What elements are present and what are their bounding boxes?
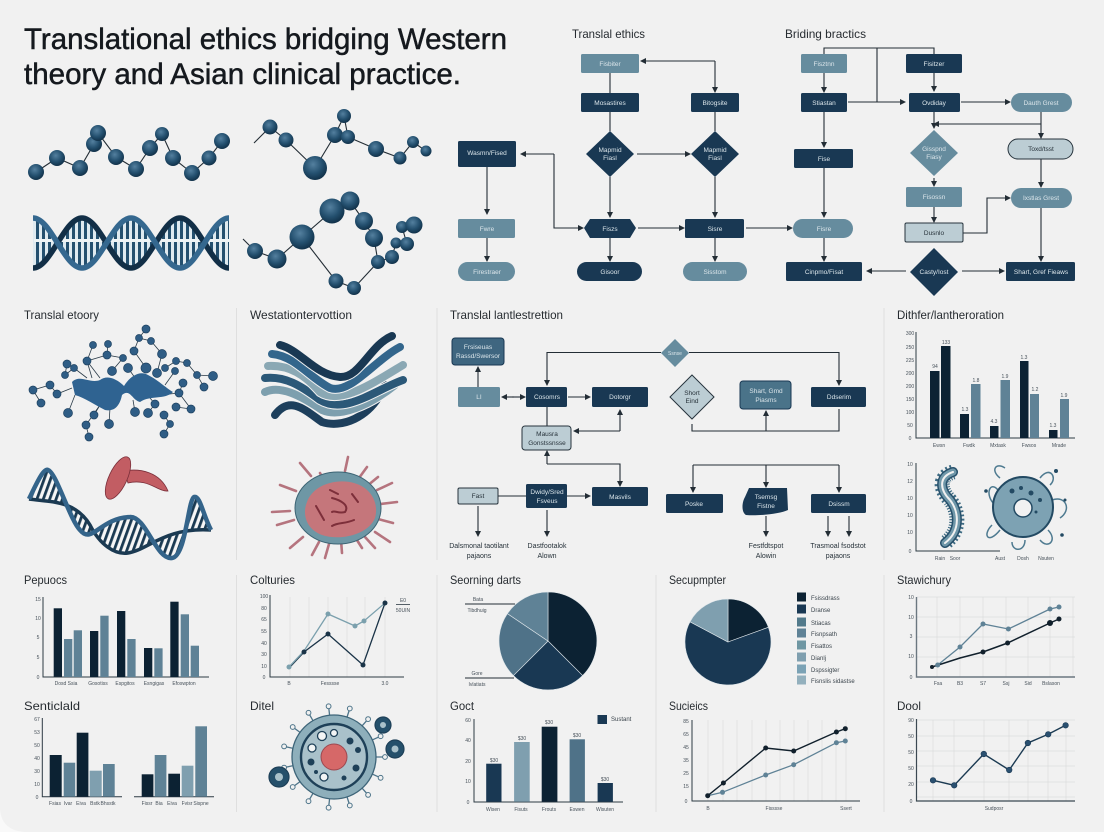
bar chart: dithfer: Fwsos [1022,443,1037,449]
line chart: colturies: 10 [261,664,267,670]
small diamond [661,339,689,367]
bar chart: pepuocs: 10 [35,616,41,622]
heading: seorning darts: Seorning darts [450,573,521,587]
box: Ddserim [827,394,851,401]
bar chart: dithfer: 1.9 [1002,374,1009,380]
line chart: dool: 50 [908,750,914,756]
decision diamond: Eind [685,398,699,405]
box: Fsveus [537,498,558,505]
bar chart: senticlald: 0 [36,795,39,801]
box [1006,262,1075,281]
bar chart: pepuocs: 0 [37,675,40,681]
box [909,93,960,112]
pie legend: Fisattos [811,644,832,650]
box [458,219,515,238]
pie legend: Dranse [811,608,831,614]
title [24,23,507,91]
box: Masvils [609,494,632,501]
decision diamond: Gisspnd [922,146,946,153]
bar chart: senticlald: 50 [34,743,40,749]
icon: worm microbe chart [907,462,1000,562]
decision diamond: Fiasl [708,155,722,162]
line chart: sucieics: B [706,806,710,812]
line chart: stawichury: Ssj [1003,681,1009,687]
bar chart: senticlald: 10 [34,782,40,788]
pill: Sisstom [703,269,727,276]
bar chart: senticlald: 30 [34,769,40,775]
pie legend: Fisnpsath [811,632,837,638]
molecule chain one [28,125,230,181]
decision diamond: Casty/Iost [920,269,949,276]
line chart: colturies: 30 [261,652,267,658]
pale box: Gonstssnsse [528,440,566,447]
box: Shart, Gref Fieaws [1014,269,1069,276]
line chart: dool: 0 [910,799,913,805]
box: Frsiseuas [464,344,493,351]
molecule chain two [254,109,432,180]
line chart: stawichury: Sid [1024,681,1032,687]
decision diamond [691,131,739,177]
pie labels: Tibdhuig [468,608,487,614]
bar chart: dithfer: 1.8 [973,378,980,384]
box [581,54,639,73]
pill outlined: Toxd/tsst [1028,146,1054,153]
line chart: sucieics: Fisssse [766,806,783,812]
box: Poske [685,501,703,508]
box: Rassd/Swersor [456,353,501,360]
bar chart: dithfer: 1.3 [1021,355,1028,361]
bar chart: dithfer: 133 [942,340,950,346]
box [458,141,516,167]
line chart: stawichury: B3 [957,681,963,687]
line chart: colturies: 3.0 [382,681,389,687]
bar chart: dithfer: 4.3 [991,419,998,425]
decision diamond [670,375,714,419]
blob box: Tsemsg [755,494,778,501]
icon: worm microbe chart: 10 [907,496,913,502]
decision diamond: Fiasl [603,155,617,162]
line chart: colturies: 40 [261,641,267,647]
pie legend: Fisnslis sidastse [811,679,855,685]
heading: dithfer lanther oration: Dithfer/lantheroration [897,308,1004,322]
line chart: sucieics: Ssert [840,806,852,812]
box [740,381,791,409]
line chart: sucieics [683,719,860,812]
pill [683,262,747,281]
heading: westationtervottion: Westationtervottion [250,308,352,322]
box: Fisztnn [814,61,835,68]
heading: goct: Goct [450,699,475,713]
line chart: dool [908,718,1075,812]
pill [458,262,515,281]
heading: translal ethics: Translal ethics [572,27,645,41]
dna double helix [33,218,230,268]
line chart: dool: 90 [908,718,914,724]
bar chart: goct: Fisuts [514,807,528,813]
bar chart: senticlald: Ivar [64,801,72,807]
pie chart: secupmpter [685,599,771,685]
heading: briding practics: Briding bractics [785,27,866,41]
box: Piasms [755,397,777,404]
bar chart: goct: $30 [545,720,553,726]
caption: Alown [537,553,557,560]
box [906,187,962,207]
box [801,54,847,73]
bar chart: senticlald: Bstk [90,801,100,807]
bar chart: dithfer: 94 [932,364,938,370]
pill: Firestraer [473,269,502,276]
icon: round microbe: Dosh [1017,556,1029,562]
decision diamond: Short [684,390,700,397]
box [666,494,723,513]
bar chart: goct: 20 [465,759,471,765]
bar chart: pepuocs: 15 [35,597,41,603]
caption: Trasmoal fsodstot [810,543,866,550]
decision diamond: Mapmid [703,147,727,154]
line chart: colturies [260,594,410,687]
icon: worm microbe chart: Rain [935,556,945,562]
bar chart: dithfer: 200 [906,371,914,377]
caption [528,543,567,560]
icon: worm microbe chart: 10 [907,530,913,536]
line chart: stawichury: 3 [910,634,913,640]
heading: stawichury: Stawichury [897,573,951,587]
pill: Dauth Grest [1023,100,1059,107]
line chart: stawichury: 10 [908,595,914,601]
icon: dna ribbon [29,470,211,558]
box [906,54,962,73]
line chart: colturies: B [287,681,291,687]
pill [793,219,853,238]
pie labels: Bata [473,597,483,603]
line chart: stawichury [908,595,1075,687]
box: Fisbiter [599,61,621,68]
pie chart: seorning [499,592,597,690]
box: Sisre [708,226,723,233]
pale box [522,426,571,450]
heading: pepuocs: Pepuocs [24,573,67,587]
box [526,387,567,407]
bar chart: senticlald: Bia [155,801,163,807]
bar chart: dithfer: 0 [909,436,912,442]
line chart: dool: 50 [908,734,914,740]
box: Mosastires [594,100,626,107]
line chart: sucieics: 45 [683,745,689,751]
box [452,338,504,365]
caption: pajaons [467,553,492,560]
title: theory and Asian clinical practice. [24,58,461,91]
pie legend: Dspssigter [811,668,839,674]
box: Ovdiday [922,100,947,107]
caption [810,543,866,560]
bar chart: dithfer: Mxtask [990,443,1006,449]
bar chart: senticlald: Fsias [49,801,61,807]
bar chart: dithfer: 1.3 [1050,423,1057,429]
box: Dotorgr [609,394,632,401]
icon: round microbe: Nsuten [1038,556,1054,562]
bar chart: dithfer: 50 [907,423,913,429]
line chart: stawichury: 10 [908,654,914,660]
icon: red virus cell [272,457,397,558]
bar chart: pepuocs: Gosotiss [88,681,108,687]
bar chart: senticlald: 67 [34,717,40,723]
icon: worm microbe chart: Soor [950,556,961,562]
bar chart: dithfer: Mrade [1052,443,1066,449]
caption: Dastfootalok [528,543,567,550]
bar chart: pepuocs: 5 [37,635,40,641]
icon: round microbe [984,466,1066,562]
line chart: sucieics: 15 [683,784,689,790]
pill outlined [1008,139,1073,159]
line chart: colturies: 65 [261,617,267,623]
bar chart: goct: $30 [601,777,609,783]
line chart: sucieics: 85 [683,719,689,725]
icon: molecule network [29,325,218,441]
blob box: Fistne [757,503,775,510]
decision diamond: Mapmid [598,147,622,154]
caption: Alowin [756,553,776,560]
pill [1011,188,1072,208]
pie labels [465,597,515,688]
line chart: colturies: Fesssse [321,681,340,687]
bar chart: dithfer: 100 [906,410,914,416]
box [458,387,500,407]
caption: Festfdtspot [749,543,783,550]
box [691,93,739,112]
bar chart: dithfer: 225 [906,358,914,364]
bar chart: dithfer [906,331,1075,449]
bar chart: goct: Wisuten [596,807,614,813]
line chart: stawichury: Bslason [1042,681,1060,687]
panel: top flowchart [458,27,1075,296]
bar chart: dithfer: 150 [906,397,914,403]
bar chart: dithfer: 1.2 [1032,387,1039,393]
decision diamond: Fiasy [926,154,943,161]
icon: worm microbe chart: 10 [907,462,913,468]
box: Cinpmo/Fisat [805,269,843,276]
icon: round cell [269,704,404,810]
icon: worm microbe chart: 12 [907,479,913,485]
heading: colturies: Colturies [250,573,295,587]
heading: dool: Dool [897,699,921,713]
box: Stiastan [812,100,836,107]
pie labels: Ivlatiats [469,682,486,688]
box [592,487,648,506]
line chart: stawichury: 10 [908,615,914,621]
bar chart: dithfer: 1.3 [962,407,969,413]
hexagon box [584,219,636,238]
pie legend: Fsissdrass [811,596,840,602]
box: Fise [818,156,831,163]
pie legend: Dianlj [811,656,826,662]
caption: pajaons [826,553,851,560]
pill: Fisre [817,226,832,233]
bar chart: pepuocs: Esngigas [144,681,165,687]
pale box: Dusnlo [924,230,945,237]
bar chart: senticlald: Fissr [142,801,153,807]
line chart: sucieics: 35 [683,758,689,764]
bar chart: senticlald [34,717,214,807]
box: Cosomrs [534,394,561,401]
caption [449,543,509,560]
box: Fisossn [923,194,946,201]
bar chart: goct: Sustant [611,717,632,723]
bar chart: senticlald: 53 [34,730,40,736]
heading: sucieics: Sucieics [669,699,708,713]
box: LI [476,394,482,401]
line chart: stawichury: 0 [910,675,913,681]
icon: round microbe: Aust [995,556,1006,562]
line chart: dool: 50 [908,766,914,772]
line chart: colturies: 100 [260,594,268,600]
box [685,219,744,238]
pie labels: Gore [471,671,483,677]
bar chart: goct: Wisen [486,807,500,813]
line chart: colturies: 55 [261,629,267,635]
bar chart: dithfer: 200 [906,384,914,390]
bar chart: dithfer: 250 [906,345,914,351]
line chart: stawichury: Fsa [934,681,942,687]
bar chart: goct: 10 [465,779,471,785]
bar chart: goct: 60 [465,718,471,724]
line chart: sucieics: 25 [683,771,689,777]
box: Fisitzer [924,61,945,68]
bar chart: senticlald: Eiva [167,801,177,807]
heading: ditel: Ditel [250,699,274,713]
decision diamond [586,131,634,177]
box [786,262,862,281]
bar chart: senticlald: 40 [34,756,40,762]
box [811,494,866,513]
line chart: sucieics: 0 [685,799,688,805]
flow arrows [487,48,1041,271]
bar chart: dithfer: 300 [906,331,914,337]
bar chart: dithfer: Ewsn [933,443,945,449]
pale box: Mausra [536,431,558,438]
pie legend: Stiacas [811,621,831,627]
bar chart: goct: 40 [465,738,471,744]
blob box [742,488,788,515]
icon: protein ribbons [265,336,403,424]
flow arrows [478,352,849,536]
box: Dwidy/Sred [530,489,564,496]
bar chart: goct [465,715,632,813]
line chart: dool: 20 [908,782,914,788]
bar chart: goct: $30 [573,733,581,739]
pale box [905,223,963,242]
decision diamond [910,130,958,176]
caption: Dalsmonal taotilant [449,543,509,550]
line chart: colturies: 50UIN [396,608,410,614]
bar chart: pepuocs: 5 [37,655,40,661]
line chart: sucieics: 65 [683,732,689,738]
box [581,93,639,112]
line chart: colturies: E0 [400,598,406,604]
hexagon box: Fiszs [602,226,618,233]
bar chart: goct: Eswen [569,807,585,813]
molecule chain three [243,192,422,295]
box [794,149,853,168]
bar chart: goct: $30 [518,736,526,742]
pill [577,262,642,281]
small diamond: Ssnse [668,351,682,357]
bar chart: pepuocs: Efoswpton [172,681,196,687]
bar chart: senticlald: Bhsstk [100,801,116,807]
box [526,484,567,508]
heading: senticlald: Senticlald [24,699,80,713]
box: Shart, Gmd [749,388,783,395]
box: Bitogsite [703,100,728,107]
pill: Gisoor [600,269,620,276]
box [801,93,847,112]
bar chart: senticlald: Eiva [76,801,86,807]
bar chart: senticlald: Fvisr [182,801,193,807]
icon: worm microbe chart: 10 [907,513,913,519]
line chart: stawichury: S7 [980,681,986,687]
pill: Ixstlas Grest [1023,195,1059,202]
box: Wasmn/Fised [467,150,507,157]
caption [749,543,783,560]
bar chart: pepuocs: Dosd Ssia [55,681,78,687]
heading: translal etoory: Translal etoory [24,308,99,322]
box [811,387,866,407]
icon: worm microbe chart: 0 [909,549,912,555]
line chart: colturies: 0 [263,675,266,681]
heading: secupmpter: Secupmpter [669,573,726,587]
bar chart: senticlald: Sispne [193,801,209,807]
icon: red bacterium [100,453,168,503]
box: Dsissm [828,501,850,508]
bar chart: goct: 0 [467,800,470,806]
decision diamond [910,248,958,296]
bar chart: dithfer: Fwdk [963,443,975,449]
line chart: dool: Sudposr [985,806,1004,812]
bar chart: goct: Frouts [542,807,557,813]
bar chart: pepuocs: Espgitos [115,681,135,687]
panel: middle flowchart [449,308,866,560]
pill [1011,93,1072,112]
pie legend [797,592,855,685]
bar chart: pepuocs [35,597,209,687]
box: Fwre [480,226,495,233]
bar chart: goct: $30 [490,758,498,764]
bar chart: dithfer: 1.9 [1061,393,1068,399]
title: Translational ethics bridging Western [24,23,507,56]
box [592,387,648,407]
pale box: Fast [472,493,485,500]
line chart: colturies: 80 [261,606,267,612]
heading: translal lantlestrettion: Translal lantlestrettion [450,308,563,322]
pale box [458,488,498,504]
